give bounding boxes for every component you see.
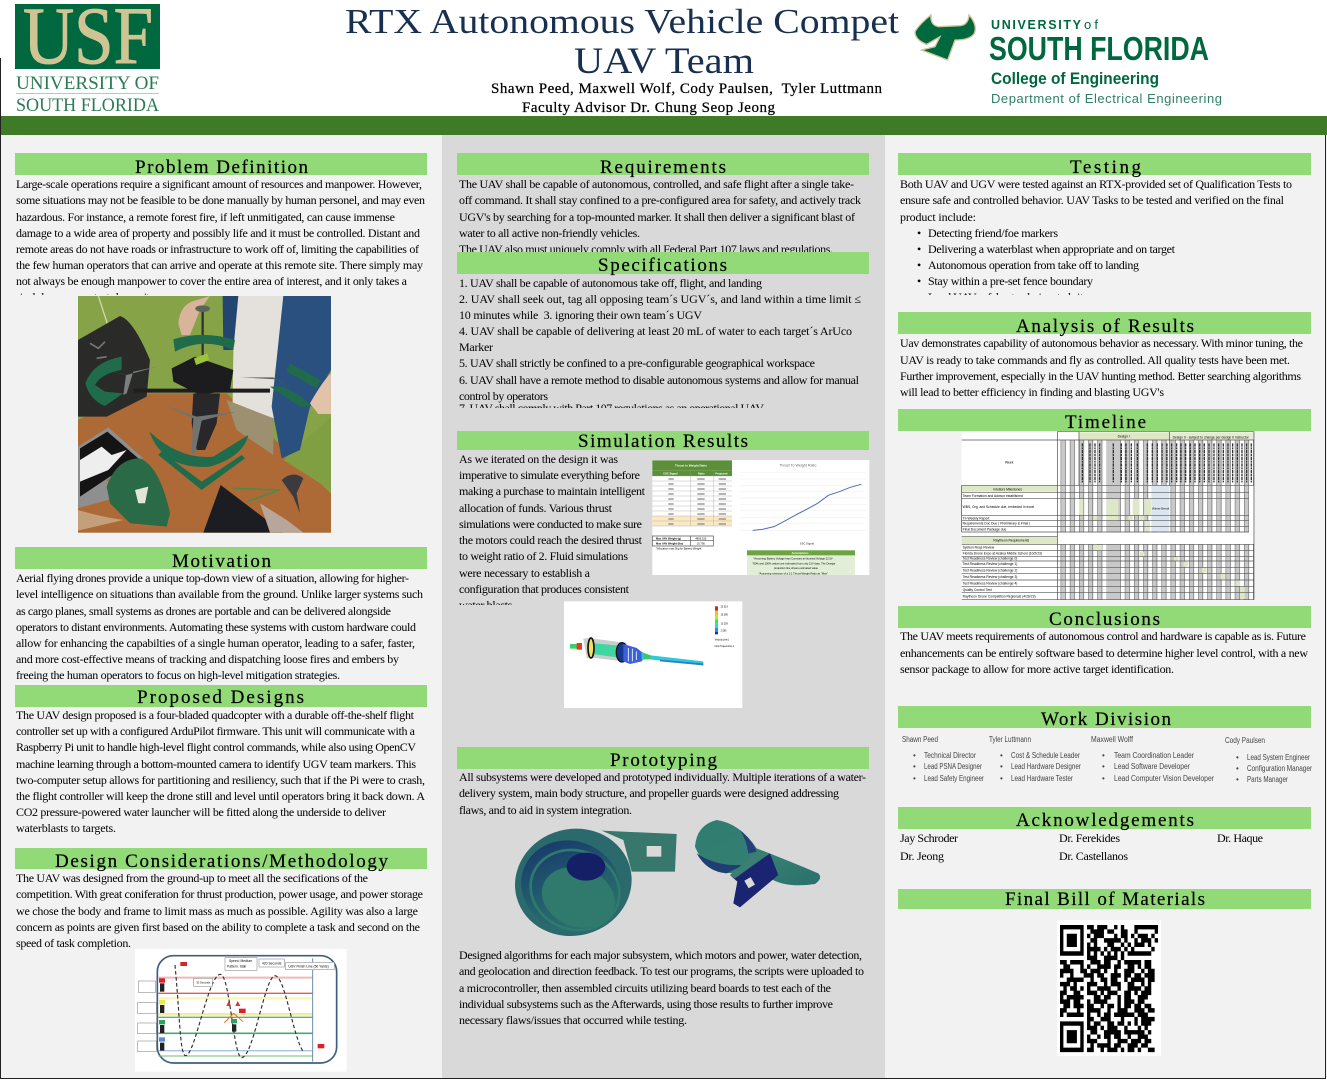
panel: analysis of results: Uav demonstrates capability of autonomous behavior as necessary. With minor tuning, the [900, 336, 1303, 350]
panel: final bill of materials [898, 889, 1311, 910]
chart: thrust to weight ratio: Thrust to Weight Ratio [675, 464, 707, 468]
panel: simulation results [445, 431, 869, 635]
icon: USF logo left: SOUTH FLORIDA [16, 95, 159, 116]
member: Tyler Luttmann [989, 735, 1081, 783]
panel: prototyping: and geolocation and direction feedback. To test our programs, the scripts were uploaded to [459, 964, 864, 978]
member: Shawn Peed: Technical Director [924, 751, 976, 760]
panel: requirements: The UAV shall be capable of autonomous, controlled, and safe flight after a single take- [459, 177, 854, 191]
panel: proposed designs: CO2 pressure-powered water launcher will be fitted along the underside to deliver [16, 805, 386, 819]
panel: specifications: 7. UAV shall comply with Part 107 regulations as an operational UAV [459, 401, 764, 415]
panel: specifications: 4. UAV shall be capable of delivering at least 20 mL of water to each target´s ArUco [459, 324, 852, 338]
chart: gantt timeline: System Reqs Review [963, 546, 995, 550]
member: Shawn Peed: • [913, 774, 916, 783]
figure: fluid simulation: 15.389 [721, 615, 728, 617]
icon: USF bull logo and department: SOUTH FLORIDA [989, 30, 1209, 67]
panel: simulation results: were necessary to establish a [459, 566, 591, 580]
diagram: competition lanes: Speed: Medium [229, 959, 253, 963]
panel: prototyping: Prototyping [610, 750, 718, 771]
panel: simulation results: the motors could reach the desired thrust [459, 533, 643, 547]
panel: problem definition: damage to a wide area of property and possibly life and it must be controlled. Distant and [16, 226, 420, 240]
panel: proposed designs: two-computer setup allows for partitioning and resiliency, such that if the Pi were to crash, [16, 773, 425, 787]
panel: prototyping: Designed algorithms for each major subsystem, which motors and power, water detection, [459, 948, 862, 962]
panel: final bill of materials: Final Bill of Materials [1005, 889, 1205, 910]
panel: motivation [15, 547, 427, 682]
panel: acknowledgements [898, 807, 1311, 863]
panel: prototyping: All subsystems were developed and prototyped individually. Multiple iterations of a water- [459, 770, 866, 784]
panel: proposed designs [15, 685, 427, 835]
chart: gantt timeline: Test Readiness Review (challenge 1) [963, 562, 1017, 566]
panel: specifications: 2. UAV shall seek out, tag all opposing team´s UGV´s, and land within a time limit ≤ [459, 292, 861, 306]
panel: motivation: Motivation [172, 551, 272, 572]
diagram: competition lanes: Pattern: Stair [227, 965, 247, 969]
panel: simulation results: water blasts. [459, 598, 515, 612]
member: Cody Paulsen [1225, 736, 1312, 784]
panel: prototyping: flaws, and to aid in system integration. [459, 803, 632, 817]
member: Shawn Peed [902, 735, 984, 783]
panel: motivation: and more cost-effective means of tracking and dispatching loose fires and embers by [16, 652, 399, 666]
panel: analysis of results: Further improvement, especially in the UAV hunting method. Better searching algorithms [900, 369, 1301, 383]
panel: requirements: UGV's by searching for a top-mounted marker. It shall then deliver a significant blast of [459, 210, 855, 224]
panel: testing: Autonomous operation from take off to landing [928, 258, 1139, 272]
panel: design considerations: The UAV was designed from the ground-up to meet all the secifications of the [16, 871, 368, 885]
panel: motivation: freeing the human operators to focus on high-level mitigation strategies. [16, 668, 340, 682]
member: Maxwell Wolff: Team Coordination Leader [1114, 751, 1194, 760]
chart: gantt timeline: Design II - subject to change per design II instructor [1173, 435, 1250, 439]
chart: gantt timeline [962, 432, 1254, 600]
panel: testing: Testing [1070, 157, 1142, 178]
authors: Faculty Advisor Dr. Chung Seop Jeong [522, 100, 776, 116]
panel: testing: ensure safe and controlled behavior. UAV Tasks to be tested and verified on the final [900, 193, 1285, 207]
figure: fluid simulation: Velocity [mm] [715, 639, 729, 642]
panel: testing: Land UAV safely at a designated site [928, 290, 1088, 304]
figure: fluid simulation: 10.259 [721, 623, 728, 625]
panel: problem definition: single human operator to be on site. [16, 290, 156, 304]
chart: gantt timeline: Week [1005, 461, 1014, 465]
chart: thrust to weight ratio: ESC Signal [663, 472, 678, 476]
panel: testing: • [917, 290, 921, 304]
panel: prototyping: necessary flaws/issues that occurred while testing. [459, 1013, 687, 1027]
member: Tyler Luttmann: Tyler Luttmann [989, 735, 1031, 744]
panel: acknowledgements: Acknowledgements [1016, 810, 1194, 831]
panel: proposed designs: The UAV design proposed is a four-bladed quadcopter with a durable off-the-shelf flight [16, 708, 415, 722]
title: RTX Autonomous Vehicle Compet [345, 2, 899, 41]
panel: conclusions: Conclusions [1049, 609, 1160, 630]
panel: testing: Delivering a waterblast when appropriate and on target [928, 242, 1176, 256]
panel: analysis of results: will lead to better efficiency in finding and blasting UGV's [900, 385, 1164, 399]
icon: USF bull logo and department: College of Engineering [991, 70, 1159, 88]
panel: acknowledgements: Jay Schroder [900, 831, 958, 845]
member: Shawn Peed: • [913, 751, 916, 760]
panel: specifications [445, 252, 875, 431]
icon: USF bull logo and department: of [1084, 17, 1098, 32]
panel: timeline [898, 409, 1311, 433]
chart: gantt timeline: Winter Break [1152, 507, 1170, 511]
chart: gantt timeline: Tri-Weekly Report [963, 516, 989, 520]
member: Cody Paulsen: Lead System Engineer [1247, 753, 1310, 762]
diagram: competition lanes: UGV Finish Line (50 Yards) [288, 965, 329, 969]
chart: gantt timeline: Florida Drone Expo at Azalea Middle School (10/2/23) [963, 552, 1042, 556]
panel: specifications: 10 minutes while 3. ignoring their own team´s UGV [459, 308, 702, 322]
panel: testing: Detecting friend/foe markers [928, 226, 1058, 240]
panel: simulation results: imperative to simulate everything before [459, 468, 640, 482]
chart: gantt timeline: Team Formation and Advisor established [963, 494, 1023, 498]
member: Cody Paulsen: • [1236, 764, 1239, 773]
chart: thrust to weight ratio: Projected [715, 472, 728, 476]
member: Maxwell Wolff: • [1102, 751, 1105, 760]
panel: prototyping: individual subsystems such as the Afterwards, using those results to further improve [459, 997, 833, 1011]
title: UAV Team [574, 41, 754, 82]
chart: gantt timeline: Raytheon Drone Competition Regionals (4/26/23) [963, 595, 1036, 599]
panel: requirements: water to all active non-friendly vehicles. [459, 226, 640, 240]
panel: testing: • [917, 242, 921, 256]
panel: specifications: Specifications [598, 255, 727, 276]
icon: USF bull logo and department: Department of Electrical Engineering [991, 91, 1222, 106]
panel: motivation: operators to distant environments. Automating these systems with custom hardware could [16, 620, 416, 634]
panel: simulation results: configuration that produces consistent [459, 582, 630, 596]
chart: gantt timeline: WBS, Org. and Schedule due, embeded in excel [963, 505, 1035, 509]
icon: USF bull logo and department [915, 15, 1222, 106]
photo: drone on table [78, 296, 331, 533]
chart: thrust to weight ratio: 4856.515 [695, 536, 707, 540]
panel: analysis of results: UAV is ready to take commands and fly as controlled. All quality tests have been met. [900, 353, 1290, 367]
chart: gantt timeline: Raytheon Requirements [993, 539, 1030, 543]
panel: testing [895, 153, 1315, 312]
QR code [1057, 920, 1161, 1056]
chart: thrust to weight ratio: projection line shows estimated value [774, 566, 819, 570]
panel: simulation results: simulations were conducted to make sure [459, 517, 642, 531]
panel: simulation results: Simulation Results [578, 431, 748, 452]
panel: problem definition: remote areas do not have roads or infrastructure to work off of, limiting the capabilities of [16, 242, 419, 256]
header band [0, 116, 1327, 135]
member: Cody Paulsen: • [1236, 775, 1239, 784]
panel: specifications: 1. UAV shall be capable of autonomous take off, flight, and landing [459, 276, 762, 290]
panel: acknowledgements: Dr. Jeong [900, 849, 944, 863]
chart: gantt timeline: Final Document Package due [963, 527, 1006, 531]
chart: thrust to weight ratio [652, 460, 869, 575]
member: Tyler Luttmann: Lead Hardware Designer [1011, 762, 1081, 771]
chart: gantt timeline: Requirements Doc Due ( Preliminary & Final ) [963, 522, 1030, 526]
panel: work division [898, 706, 1312, 784]
icon: USF bull logo and department: UNIVERSITY [991, 18, 1082, 32]
panel: testing: Both UAV and UGV were tested against an RTX-provided set of Qualification Tests to [900, 177, 1292, 191]
chart: gantt timeline: Intuitors Milestones [993, 487, 1022, 491]
title [345, 2, 899, 82]
panel: motivation: allow for enhancing the capabilties of a single human operator, leading to a safer, faster, [16, 636, 415, 650]
diagram: competition lanes: 30 Seconds [196, 981, 211, 985]
panel: problem definition [15, 153, 427, 316]
panel: design considerations: Design Considerations/Methodology [55, 851, 388, 872]
panel: proposed designs: Raspberry Pi unit to handle high-level flight control commands, while also using OpenCV [16, 740, 416, 754]
panel: testing: • [917, 226, 921, 240]
panel: problem definition: some situations may not be feasible to be done manually by human personel, and may even [16, 193, 425, 207]
member: Cody Paulsen: • [1236, 753, 1239, 762]
figure: fluid simulation: Flow Trajectories 1 [715, 645, 735, 648]
member: Tyler Luttmann: Lead Hardware Tester [1011, 774, 1073, 783]
panel: problem definition: Problem Definition [135, 157, 308, 178]
panel: requirements: The UAV also must uniquely comply with all Federal Part 107 laws and regulations. [459, 242, 833, 256]
icon: USF logo left [15, 0, 160, 116]
chart: gantt timeline: Test Readiness Review (challenge 2) [963, 569, 1017, 573]
panel: conclusions [898, 606, 1311, 676]
panel: proposed designs: the flight controller will keep the drone still and level until operators bring it back down. A [16, 789, 425, 803]
chart: gantt timeline: Test Readiness Review (challenge 3) [963, 575, 1017, 579]
panel: conclusions: The UAV meets requirements of autonomous control and hardware is capable as is. Future [900, 629, 1306, 643]
chart: thrust to weight ratio: *Assuming Battery Voltage kept Constant at Nominal Voltage 22.5V [753, 557, 833, 561]
figure: fluid simulation: 20.519 [721, 607, 728, 609]
chart: thrust to weight ratio: Assumptions [792, 551, 809, 555]
panel: specifications: 5. UAV shall strictly be confined to a pre-configurable geographical workspace [459, 356, 815, 370]
panel: testing: product include: [900, 210, 976, 224]
member: Cody Paulsen: Cody Paulsen [1225, 736, 1265, 745]
panel: design considerations: competition. With great coniferation for thrust production, power usage, and power storage [16, 887, 423, 901]
panel: proposed designs: controller set up with a configured ArduPilot firmware. This unit will communicate with a [16, 724, 416, 738]
panel: testing: Stay within a pre-set fence boundary [928, 274, 1093, 288]
diagram: competition lanes: 420 Seconds [262, 961, 282, 965]
panel: specifications: Marker [459, 340, 493, 354]
chart: thrust to weight ratio: Max UAV Weight (g) [656, 536, 681, 540]
chart: gantt timeline: Test Readiness Review (challenge 0) [963, 556, 1017, 560]
panel: proposed designs: machine learning through a bottom-mounted camera to identify UGV team markers. This [16, 757, 416, 771]
panel: design considerations: we chose the body and frame to limit mass as much as possible. Agility was also a large [16, 904, 418, 918]
panel: timeline: Timeline [1065, 412, 1146, 433]
authors: Shawn Peed, Maxwell Wolf, Cody Paulsen, Tyler Luttmann [491, 81, 882, 97]
panel: prototyping: delivery system, main body structure, and propeller guards were designed addressing [459, 786, 839, 800]
chart: gantt timeline: Test Readiness Review (challenge 4) [963, 582, 1017, 586]
member: Tyler Luttmann: Cost & Schedule Leader [1011, 751, 1080, 760]
member: Shawn Peed: Lead PSNA Designer [924, 762, 982, 771]
chart: thrust to weight ratio: Thrust To Weight Ratio [779, 464, 816, 468]
chart: thrust to weight ratio: Ratio [698, 472, 705, 476]
authors [491, 81, 882, 116]
chart: thrust to weight ratio: *90% and 100% values are estimated from only 21V data. The Orange [752, 561, 836, 565]
panel: simulation results: allocation of funds. Various thrust [459, 501, 613, 515]
member: Shawn Peed: Lead Safety Engineer [924, 774, 984, 783]
panel: specifications: 6. UAV shall have a remote method to disable autonomous systems and allow for manual [459, 373, 860, 387]
panel: conclusions: enhancements can be entirely software based to determine higher level control, with a new [900, 646, 1308, 660]
panel: acknowledgements: Dr. Castellanos [1059, 849, 1128, 863]
panel: problem definition: not always be enough manpower to cover the entire area of interest, and it only takes a [16, 274, 408, 288]
member: Cody Paulsen: Parts Manager [1247, 775, 1288, 784]
panel: acknowledgements: Dr. Haque [1217, 831, 1263, 845]
chart: thrust to weight ratio: ESC Signal [800, 541, 814, 545]
member: Maxwell Wolff: • [1102, 774, 1105, 783]
panel: motivation: Aerial flying drones provide a unique top-down view of a situation, allowing for higher- [16, 571, 409, 585]
figure: 3D printed parts [503, 816, 820, 949]
panel: motivation: level intelligence on situations than available from the ground. Unlike larger systems such [16, 587, 423, 601]
panel: prototyping: a microcontroller, then assembled circuits utilizing beard boards to test each of the [459, 981, 831, 995]
icon: USF logo left: UNIVERSITY OF [16, 73, 159, 94]
chart: thrust to weight ratio: *Allocation max 5kg for Battery Weight [656, 546, 702, 550]
chart: thrust to weight ratio: Max UAV Weight (lbs) [656, 541, 683, 545]
chart: thrust to weight ratio: *Assuming minimum of a 2:1 Thrust-Weight Ratio as "Max" [759, 571, 828, 575]
member: Shawn Peed: Shawn Peed [902, 735, 938, 744]
member: Cody Paulsen: Configuration Manager [1247, 764, 1312, 773]
panel: acknowledgements: Dr. Ferekides [1059, 831, 1120, 845]
panel: design considerations: speed of task completion. [16, 936, 131, 950]
member: Shawn Peed: • [913, 762, 916, 771]
member: Maxwell Wolff: • [1102, 762, 1105, 771]
member: Maxwell Wolff [1091, 735, 1214, 783]
chart: thrust to weight ratio: 10.795 [697, 541, 705, 545]
panel: specifications: control by operators [459, 389, 548, 403]
panel: testing: • [917, 258, 921, 272]
panel: design considerations: concern as points are given first based on the ability to complete a task and second on the [16, 920, 420, 934]
panel: prototyping [457, 747, 869, 1027]
panel: work division: Work Division [1041, 709, 1172, 730]
panel: testing: • [917, 274, 921, 288]
panel: analysis of results [898, 312, 1311, 399]
panel: simulation results: As we iterated on the design it was [459, 452, 618, 466]
panel: conclusions: sensor package to allow for more active target identification. [900, 662, 1174, 676]
panel: problem definition: hazardous. For instance, a remote forest fire, if left unmitigated, can cause immense [16, 210, 395, 224]
panel: requirements: Requirements [600, 157, 726, 178]
panel: proposed designs: Proposed Designs [137, 687, 304, 708]
panel: design considerations [15, 848, 427, 950]
panel: requirements [457, 153, 869, 256]
member: Maxwell Wolff: Lead Software Developer [1114, 762, 1190, 771]
diagram: competition lanes [135, 949, 347, 1072]
panel: motivation: as cargo planes, small systems as drones are portable and can be delivered alongside [16, 604, 391, 618]
chart: gantt timeline: Design I [1118, 435, 1130, 439]
figure: fluid simulation [564, 601, 742, 708]
member: Tyler Luttmann: • [1000, 751, 1003, 760]
chart: gantt timeline: Quality Control Test [963, 588, 992, 592]
member: Maxwell Wolff: Lead Computer Vision Developer [1114, 774, 1214, 783]
panel: proposed designs: waterblasts to targets. [16, 821, 116, 835]
panel: analysis of results: Analysis of Results [1016, 316, 1194, 337]
panel: requirements: off command. It shall stay confined to a pre-configured area for safety, and actively track [459, 193, 861, 207]
panel: problem definition: Large-scale operations require a significant amount of resources and manpower. However, [16, 177, 422, 191]
member: Tyler Luttmann: • [1000, 774, 1003, 783]
panel: problem definition: the few human operators that can arrive and operate at this remote site. There simply may [16, 258, 423, 272]
member: Tyler Luttmann: • [1000, 762, 1003, 771]
panel: simulation results: to weight ratio of 2. Fluid simulations [459, 549, 628, 563]
member: Maxwell Wolff: Maxwell Wolff [1091, 735, 1134, 744]
panel: simulation results: making a purchase to maintain intelligent [459, 484, 646, 498]
figure: fluid simulation: 2.565 [721, 631, 727, 633]
